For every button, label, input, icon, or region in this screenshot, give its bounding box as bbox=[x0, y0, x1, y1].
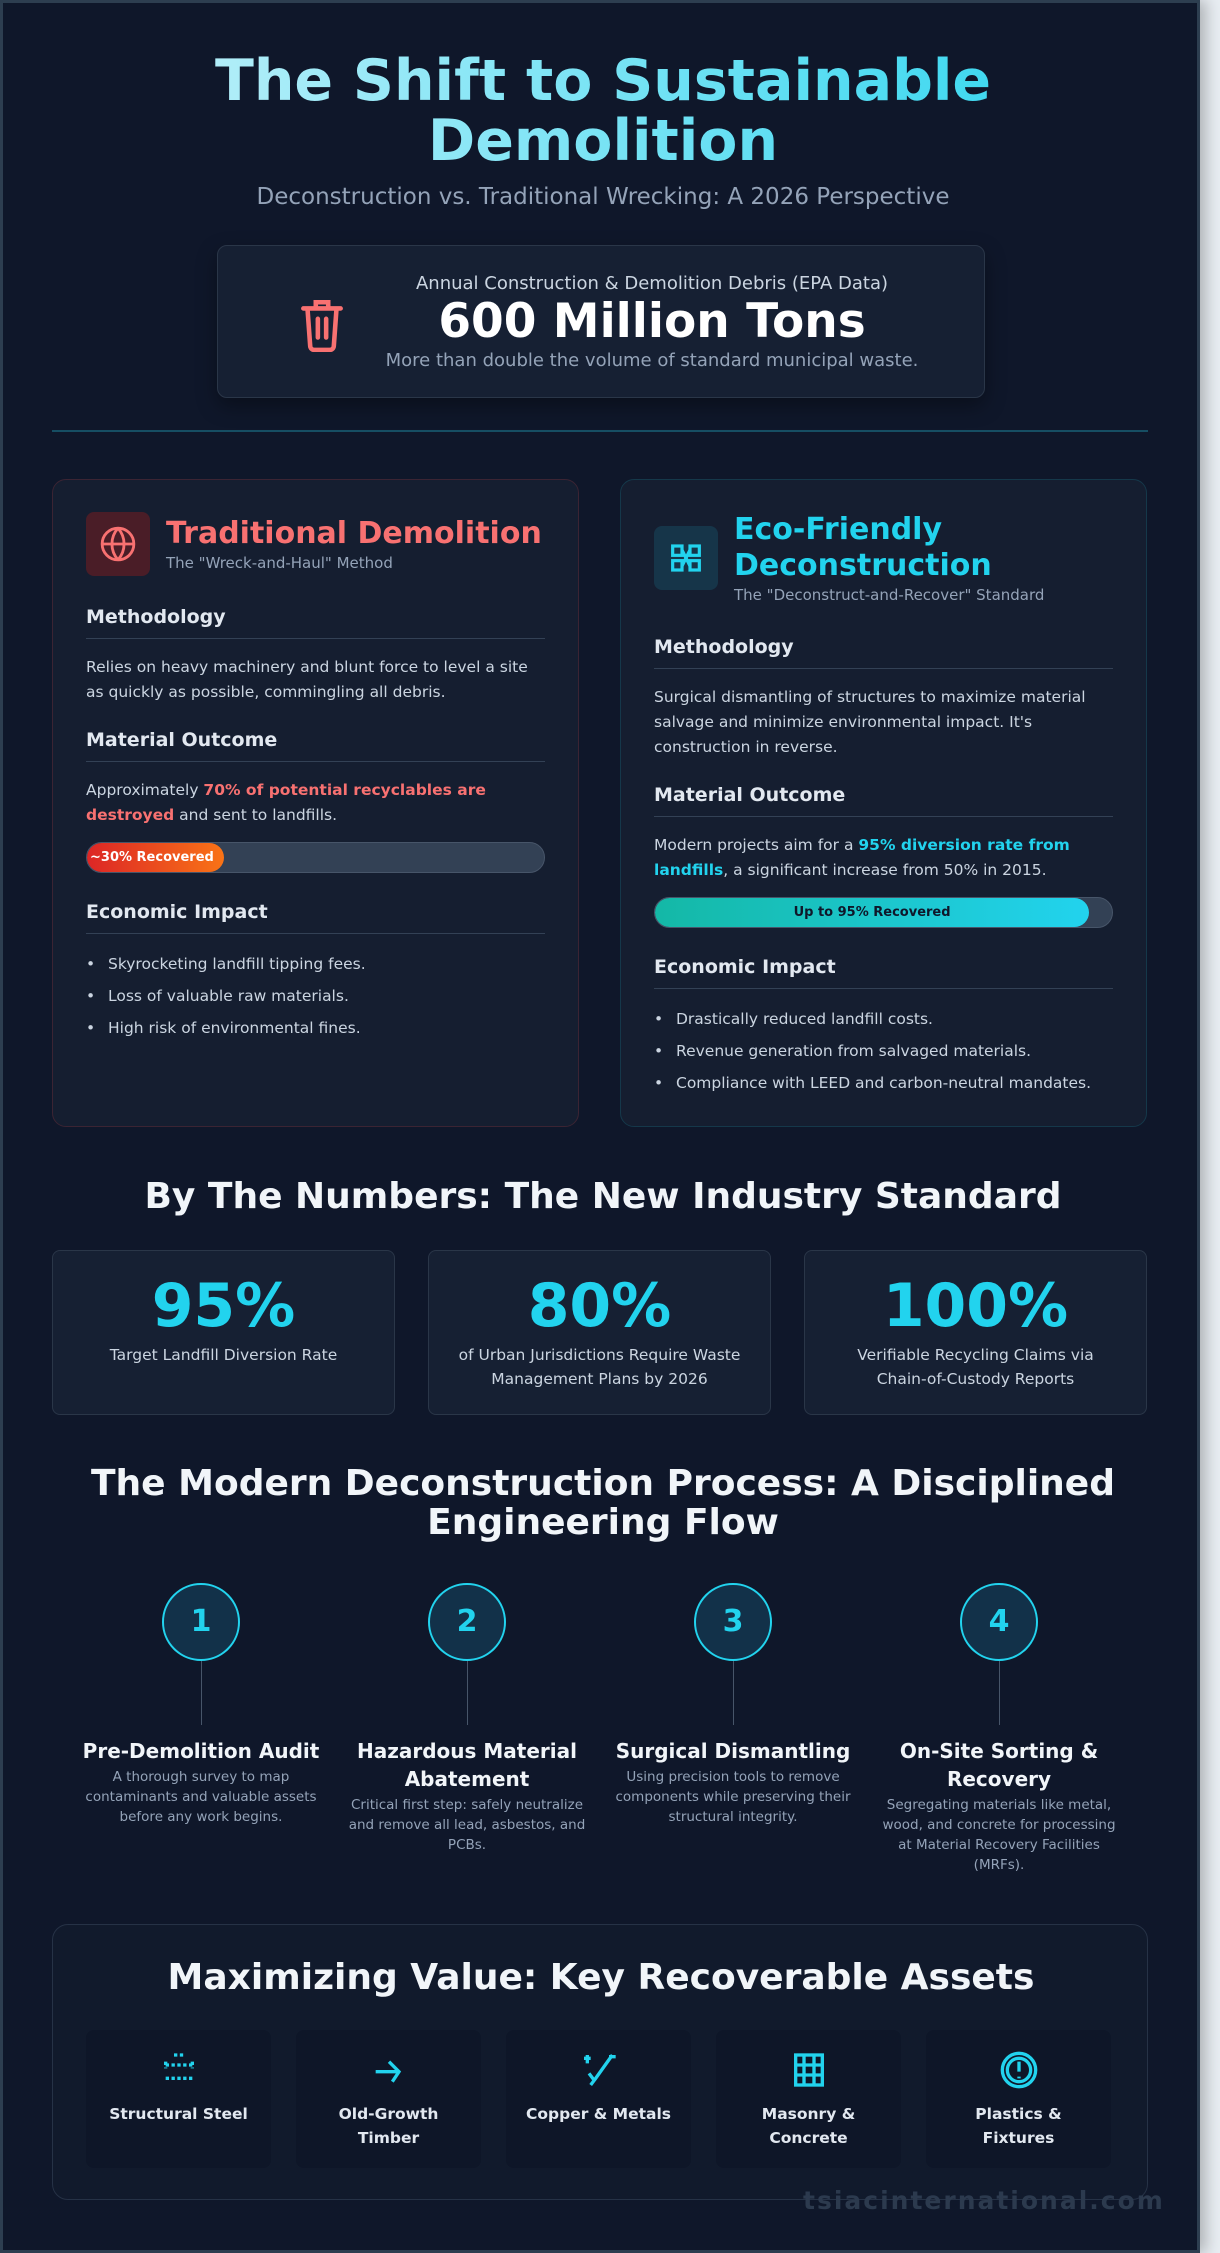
step 2: Hazardous Material Abatement bbox=[357, 1739, 577, 1791]
tile: structural steel bbox=[86, 2030, 271, 2168]
heading: by the numbers: By The Numbers: The New Industry Standard bbox=[144, 1176, 1062, 1217]
bar: 95% recovered bbox=[654, 897, 1113, 928]
panel: eco-friendly deconstruction: Surgical dismantling of structures to maximize material salvage and minimize environmental impact. It's construction in reverse. bbox=[654, 688, 1086, 756]
step 1: 1 bbox=[191, 1604, 211, 1639]
tile: masonry bbox=[716, 2030, 901, 2168]
stat: 80%: of Urban Jurisdictions Require Waste bbox=[459, 1346, 740, 1364]
heading: process: The Modern Deconstruction Process: A Disciplined bbox=[91, 1463, 1115, 1504]
title bbox=[3, 51, 1203, 171]
title: The Shift to Sustainable bbox=[215, 48, 991, 114]
step 4: 4 bbox=[989, 1604, 1009, 1639]
bar: 30% recovered: ~30% Recovered bbox=[90, 850, 214, 865]
stat: 95%: Target Landfill Diversion Rate bbox=[110, 1346, 337, 1364]
title: Demolition bbox=[428, 108, 778, 174]
panel: traditional demolition: Loss of valuable raw materials. bbox=[108, 987, 349, 1005]
step 4: On-Site Sorting & Recovery bbox=[900, 1739, 1098, 1791]
panel: traditional demolition: Material Outcome bbox=[86, 729, 277, 751]
tile: plastics: Plastics & bbox=[975, 2105, 1062, 2123]
card header bbox=[86, 512, 542, 576]
heading: process: Engineering Flow bbox=[427, 1502, 779, 1543]
panel: eco-friendly deconstruction: Methodology bbox=[654, 636, 794, 658]
tile: plastics: Fixtures bbox=[983, 2129, 1054, 2147]
tile: timber: Old-Growth bbox=[339, 2105, 438, 2123]
step 3: 3 bbox=[723, 1604, 743, 1639]
panel: traditional demolition bbox=[52, 479, 579, 1127]
icon: globe bbox=[86, 512, 150, 576]
panel: eco-friendly deconstruction: Drastically reduced landfill costs. bbox=[676, 1010, 933, 1028]
card header: Traditional Demolition bbox=[166, 516, 542, 551]
card header bbox=[654, 512, 1044, 604]
tile: structural steel: Structural Steel bbox=[109, 2105, 248, 2123]
panel: recoverable assets bbox=[52, 1924, 1148, 2200]
stat: 80%: 80% bbox=[528, 1271, 671, 1341]
stat: 100%: Verifiable Recycling Claims via bbox=[857, 1346, 1094, 1364]
watermark: tsiacinternational.com bbox=[803, 2186, 1165, 2215]
tile: masonry: Masonry & bbox=[762, 2105, 855, 2123]
stat: 80%: Management Plans by 2026 bbox=[491, 1370, 708, 1388]
hero text: Annual Construction & Demolition Debris (EPA Data) bbox=[416, 273, 888, 294]
bar: 95% recovered: Up to 95% Recovered bbox=[794, 905, 951, 920]
tile: timber: Timber bbox=[358, 2129, 419, 2147]
bar: 30% recovered bbox=[86, 842, 545, 873]
hero text: More than double the volume of standard municipal waste. bbox=[386, 350, 918, 371]
card header: Eco-Friendly bbox=[734, 512, 942, 547]
step 2: Critical first step: safely neutralize and remove all lead, asbestos, and PCBs. bbox=[349, 1797, 585, 1853]
stat: 80% bbox=[428, 1250, 771, 1415]
heading: Maximizing Value: Key Recoverable Assets bbox=[168, 1957, 1034, 1998]
panel: eco-friendly deconstruction: Revenue generation from salvaged materials. bbox=[676, 1042, 1031, 1060]
stat: 100%: 100% bbox=[883, 1271, 1068, 1341]
hero text bbox=[386, 273, 918, 371]
step 3: Using precision tools to remove components while preserving their structural integrity. bbox=[615, 1769, 851, 1825]
stat: 100% bbox=[804, 1250, 1147, 1415]
panel: traditional demolition: Skyrocketing landfill tipping fees. bbox=[108, 955, 366, 973]
panel: eco-friendly deconstruction: Compliance with LEED and carbon-neutral mandates. bbox=[676, 1074, 1091, 1092]
step 1: A thorough survey to map contaminants and valuable assets before any work begins. bbox=[85, 1769, 317, 1825]
tile: plastics bbox=[926, 2030, 1111, 2168]
tile: timber bbox=[296, 2030, 481, 2168]
stat: 95% bbox=[52, 1250, 395, 1415]
panel: eco-friendly deconstruction: Modern projects aim for a 95% diversion rate from landfills, a significant increase from 50% in 2015. bbox=[654, 836, 1070, 879]
icon: connected blocks bbox=[654, 526, 718, 590]
panel: traditional demolition: Approximately 70% of potential recyclables are destroyed and sent to landfills. bbox=[86, 781, 486, 824]
tile: copper bbox=[506, 2030, 691, 2168]
card header: The "Wreck-and-Haul" Method bbox=[166, 554, 393, 572]
icon: trash can bbox=[301, 300, 343, 352]
panel: eco-friendly deconstruction: Material Outcome bbox=[654, 784, 845, 806]
step 4: Segregating materials like metal, wood, and concrete for processing at Material Recovery Facilities (MRFs). bbox=[882, 1797, 1116, 1873]
tile: masonry: Concrete bbox=[769, 2129, 848, 2147]
step 4 bbox=[882, 1583, 1116, 1873]
card header: Deconstruction bbox=[734, 548, 992, 583]
step 2: 2 bbox=[457, 1604, 477, 1639]
step 1: Pre-Demolition Audit bbox=[83, 1739, 319, 1763]
panel: traditional demolition: Economic Impact bbox=[86, 901, 268, 923]
tile: copper: Copper & Metals bbox=[526, 2105, 671, 2123]
stat: 95%: 95% bbox=[152, 1271, 295, 1341]
step 3 bbox=[615, 1583, 851, 1825]
step 3: Surgical Dismantling bbox=[616, 1739, 850, 1763]
panel: traditional demolition: Relies on heavy machinery and blunt force to level a site as quickly as possible, commingling all debris. bbox=[86, 658, 528, 701]
heading: process bbox=[91, 1463, 1115, 1543]
panel: traditional demolition: High risk of environmental fines. bbox=[108, 1019, 361, 1037]
step 1 bbox=[83, 1583, 319, 1825]
card header: The "Deconstruct-and-Recover" Standard bbox=[734, 586, 1044, 604]
hero stat box bbox=[217, 245, 985, 398]
panel: eco-friendly deconstruction bbox=[620, 479, 1147, 1127]
step 2 bbox=[349, 1583, 585, 1853]
subtitle: Deconstruction vs. Traditional Wrecking: A 2026 Perspective bbox=[256, 184, 949, 210]
hero text: 600 Million Tons bbox=[438, 294, 866, 349]
stat: 100%: Chain-of-Custody Reports bbox=[877, 1370, 1074, 1388]
panel: traditional demolition: Methodology bbox=[86, 606, 226, 628]
panel: eco-friendly deconstruction: Economic Impact bbox=[654, 956, 836, 978]
